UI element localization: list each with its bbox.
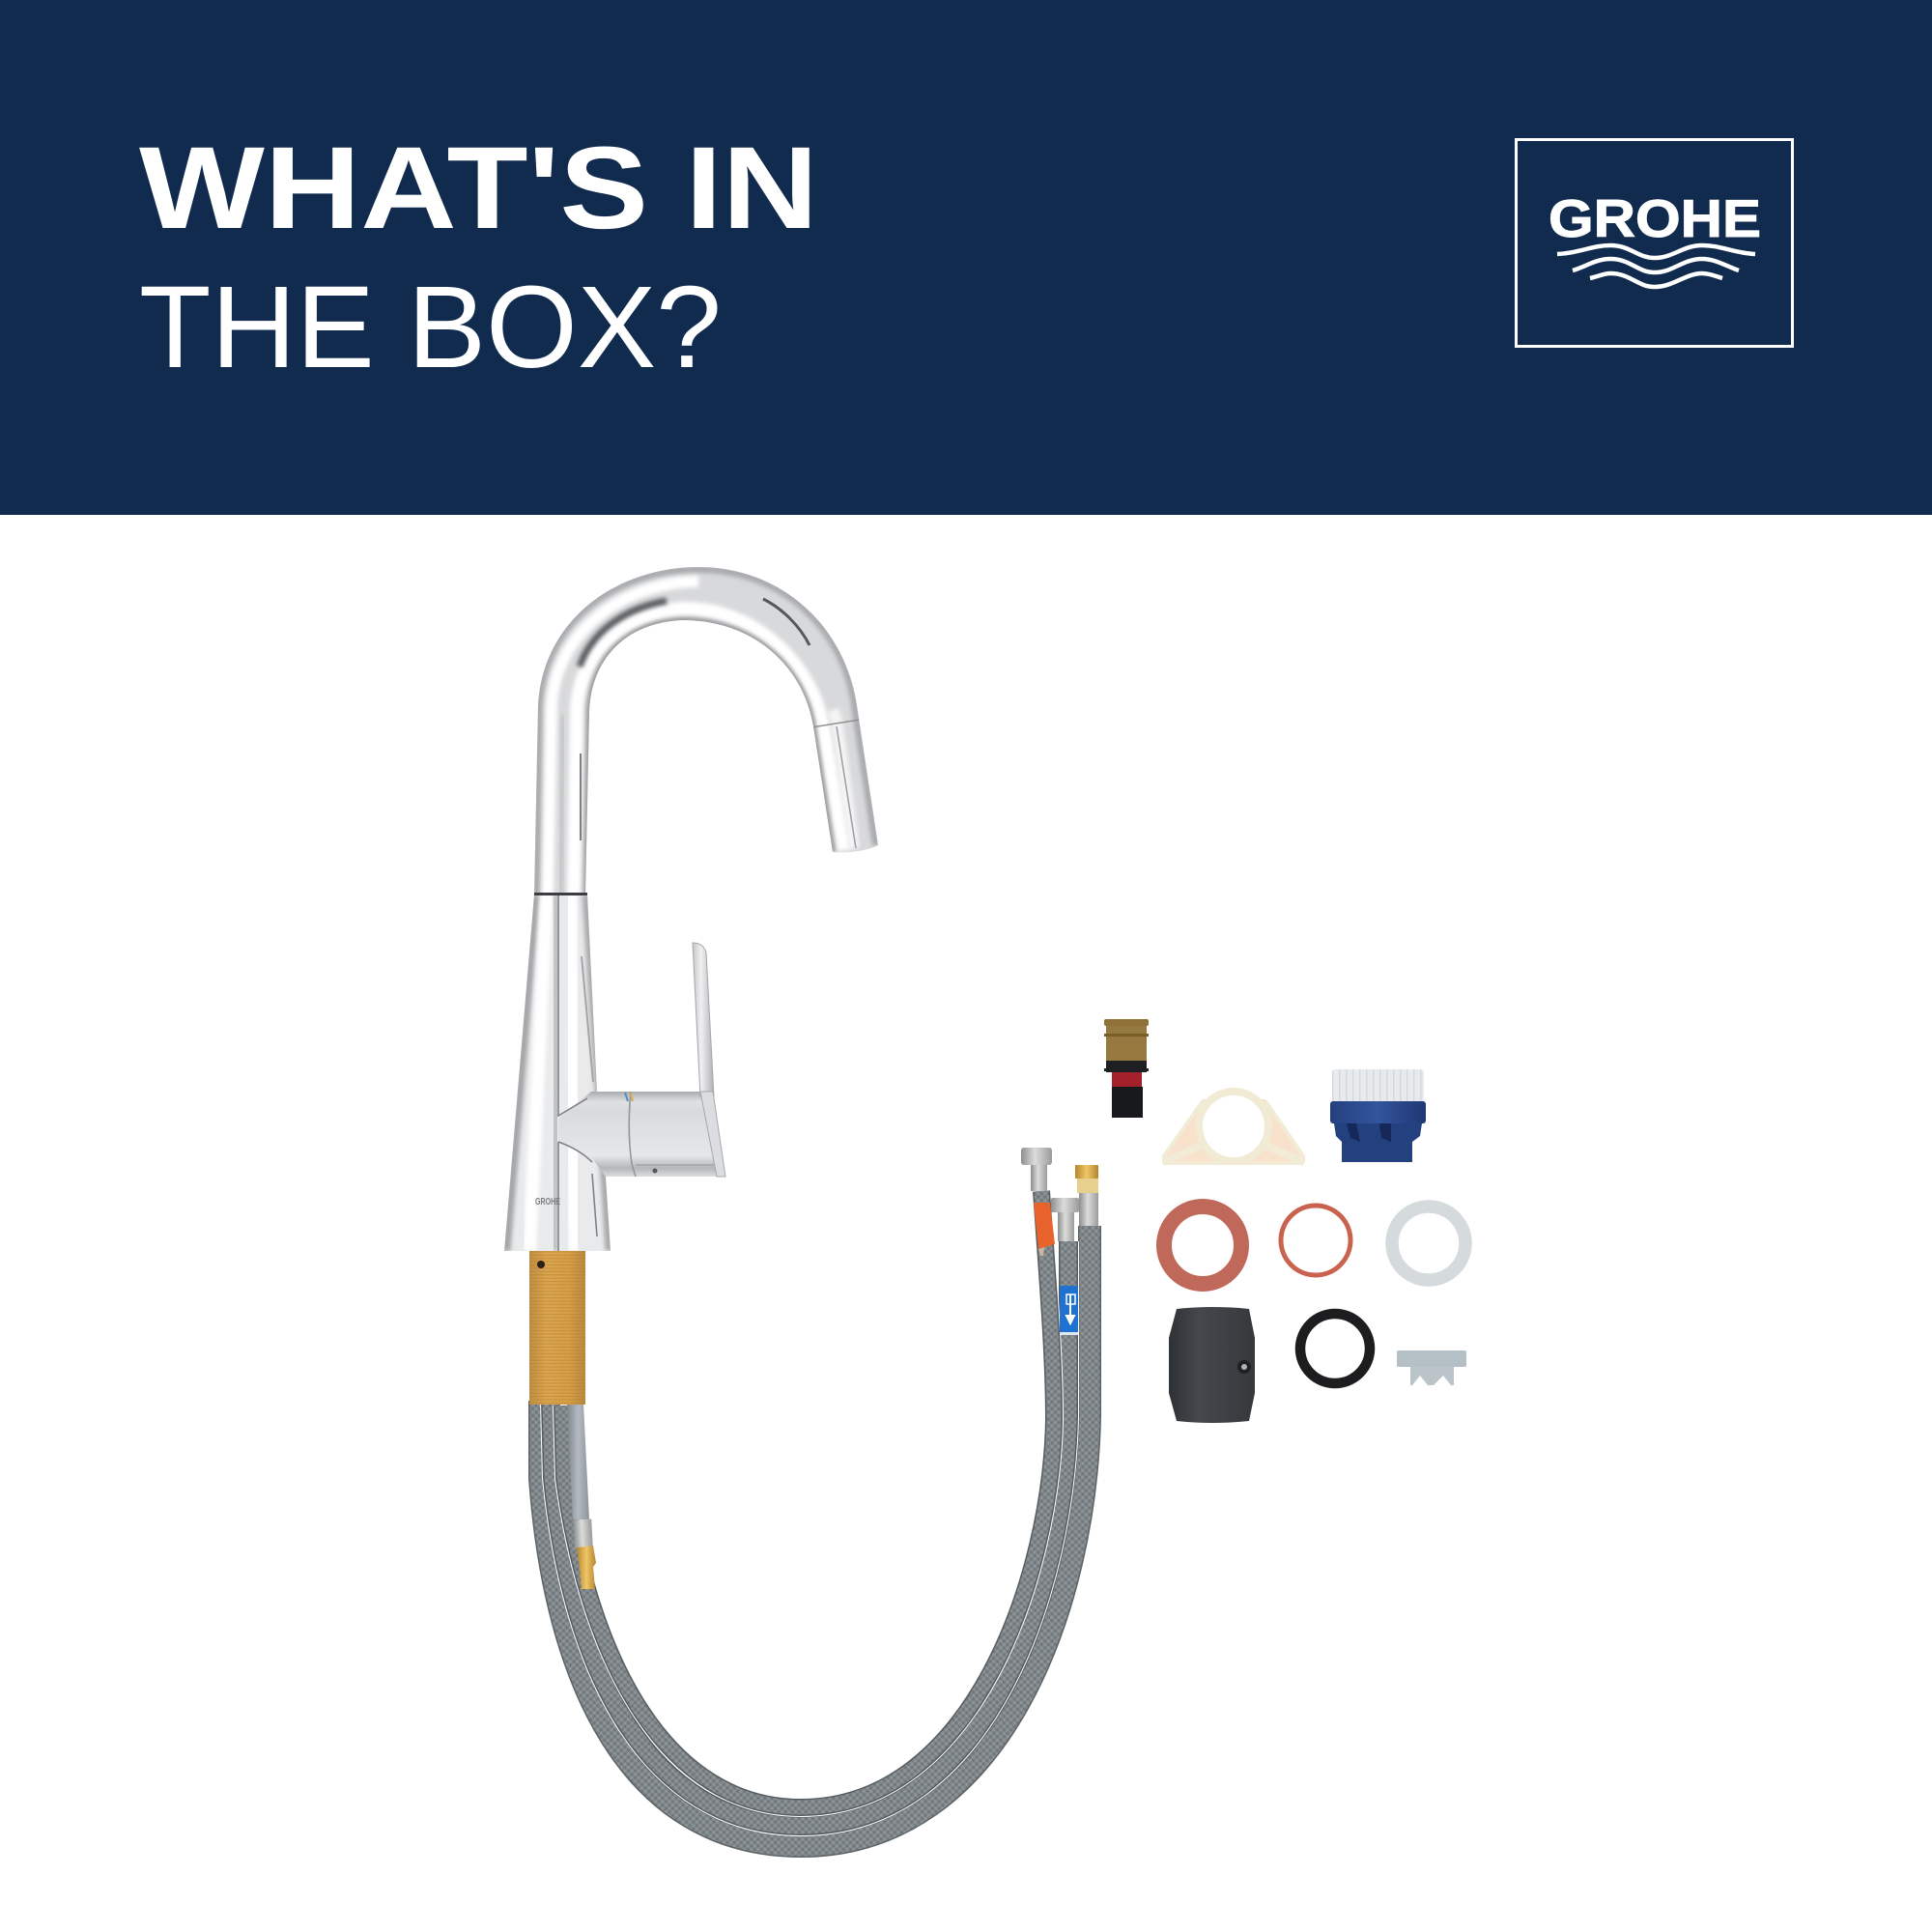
part: cream mounting plate bbox=[1162, 1092, 1305, 1165]
part: grey clip bbox=[1397, 1350, 1466, 1385]
faucet hoses bbox=[540, 1191, 1090, 1846]
threaded shank bbox=[529, 1251, 585, 1405]
faucet bbox=[504, 567, 878, 1405]
part: blue and white nut bbox=[1330, 1069, 1426, 1162]
part: thin orange ring bbox=[1281, 1206, 1350, 1275]
logo: GROHE bbox=[1517, 139, 1793, 346]
fitting: brass connector bbox=[1075, 1165, 1098, 1226]
fitting: cold supply with blue label bbox=[1051, 1198, 1079, 1335]
hose: inner with orange label bbox=[562, 1191, 1054, 1807]
gooseneck spout bbox=[534, 567, 878, 895]
title: what's in the box: THE BOX? bbox=[139, 261, 722, 392]
part: grey washer bbox=[1392, 1207, 1465, 1280]
part: black clamp bbox=[1169, 1307, 1255, 1423]
title: what's in the box bbox=[139, 122, 818, 392]
title: what's in the box: WHAT'S IN bbox=[139, 122, 818, 253]
part: large red washer bbox=[1164, 1207, 1241, 1284]
part: black ring bbox=[1300, 1314, 1370, 1383]
faucet logo mark: GROHE bbox=[535, 1197, 560, 1208]
hose: middle with blue label bbox=[551, 1241, 1068, 1826]
accessory parts bbox=[1104, 1019, 1466, 1423]
part: brown cartridge plug bbox=[1104, 1019, 1149, 1118]
header banner bbox=[0, 0, 1932, 515]
fitting: hot supply with orange label bbox=[1021, 1148, 1055, 1256]
lever handle bbox=[693, 943, 725, 1177]
hose: outer with gold fitting bbox=[540, 1226, 1090, 1846]
logo: GROHE: GROHE bbox=[1548, 188, 1761, 248]
hose end fittings bbox=[1021, 1148, 1098, 1335]
pull-out tube with fitting bbox=[567, 1404, 596, 1589]
faucet body and arm bbox=[504, 893, 725, 1251]
